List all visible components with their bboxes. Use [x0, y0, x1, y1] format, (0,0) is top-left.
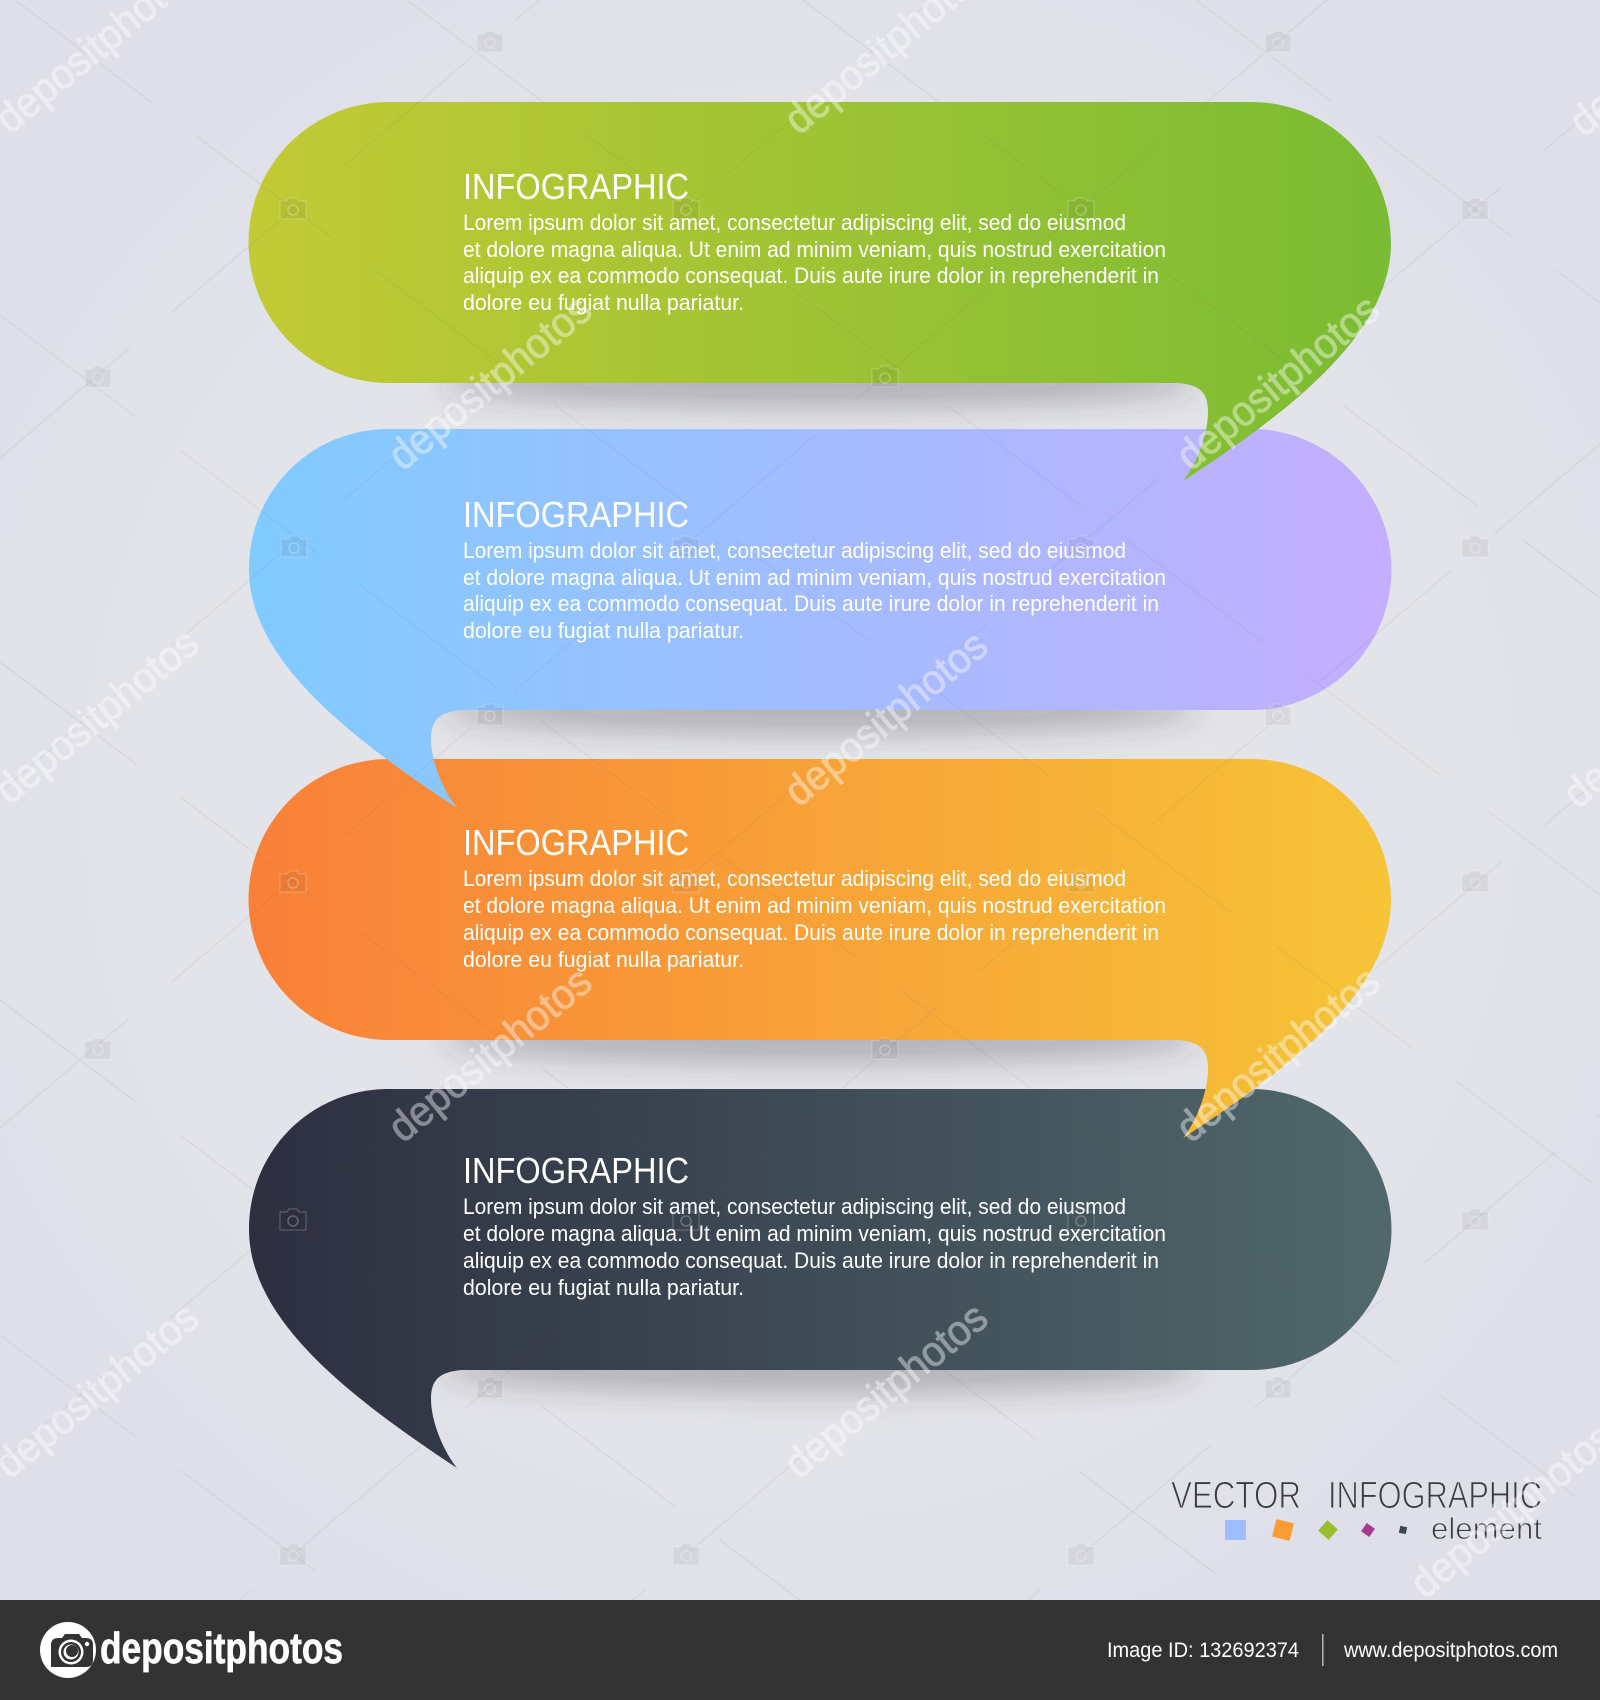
orange bubble body text: Lorem ipsum dolor sit amet, consectetur adipiscing elit, sed do eiusmod — [463, 866, 1126, 891]
panel: blue speech bubble — [249, 429, 1392, 808]
dark bubble body text — [463, 1194, 1166, 1300]
caption heading: VECTOR — [1171, 1475, 1301, 1517]
watermark camera icons — [85, 31, 1488, 1565]
logo wordmark: depositphotos — [100, 1624, 343, 1673]
icon: green diamond — [1318, 1520, 1338, 1540]
dark bubble heading: INFOGRAPHIC — [463, 1150, 689, 1191]
panel: dark speech bubble — [249, 1089, 1392, 1468]
green bubble body text: Lorem ipsum dolor sit amet, consectetur adipiscing elit, sed do eiusmod — [463, 210, 1126, 235]
blue bubble body text: dolore eu fugiat nulla pariatur. — [463, 618, 744, 643]
icon: blue square — [1225, 1520, 1246, 1540]
dark bubble body text: et dolore magna aliqua. Ut enim ad minim veniam, quis nostrud exercitation — [463, 1221, 1166, 1246]
dark bubble body text: Lorem ipsum dolor sit amet, consectetur adipiscing elit, sed do eiusmod — [463, 1194, 1126, 1219]
panel: green speech bubble — [248, 102, 1391, 481]
caption subheading: element — [1431, 1511, 1542, 1546]
dark bubble body text: dolore eu fugiat nulla pariatur. — [463, 1275, 744, 1300]
icon: purple diamond — [1361, 1523, 1375, 1537]
watermark text: depositphotos — [1167, 957, 1388, 1151]
watermark text: depositphotos — [775, 1293, 996, 1487]
green bubble body text: aliquip ex ea commodo consequat. Duis aute irure dolor in reprehenderit in — [463, 263, 1159, 288]
orange bubble heading: INFOGRAPHIC — [463, 822, 689, 863]
orange bubble shape — [248, 759, 1391, 1138]
icon: dark square — [1399, 1526, 1407, 1534]
caption heading — [1171, 1475, 1542, 1517]
green bubble shape — [248, 102, 1391, 481]
green bubble body text: et dolore magna aliqua. Ut enim ad minim veniam, quis nostrud exercitation — [463, 237, 1166, 262]
panel: orange speech bubble — [248, 759, 1391, 1138]
dark bubble shape — [249, 1089, 1392, 1468]
blue bubble shape — [249, 429, 1392, 808]
orange bubble body text: dolore eu fugiat nulla pariatur. — [463, 947, 744, 972]
dark bubble body text: aliquip ex ea commodo consequat. Duis aute irure dolor in reprehenderit in — [463, 1248, 1159, 1273]
image id: Image ID: 132692374 — [1107, 1639, 1299, 1662]
watermark text: depositphotos — [379, 285, 600, 479]
icon: orange square — [1272, 1519, 1294, 1541]
caption heading: INFOGRAPHIC — [1328, 1475, 1542, 1517]
orange bubble body text: et dolore magna aliqua. Ut enim ad minim veniam, quis nostrud exercitation — [463, 893, 1166, 918]
orange bubble body text — [463, 866, 1166, 972]
watermark text: depositphotos — [379, 957, 600, 1151]
blue bubble body text: Lorem ipsum dolor sit amet, consectetur adipiscing elit, sed do eiusmod — [463, 538, 1126, 563]
icon: camera logo — [40, 1622, 96, 1678]
website url: www.depositphotos.com — [1343, 1639, 1558, 1662]
bubble shadows — [440, 360, 1200, 1394]
caption: vector infographic element — [1171, 1475, 1542, 1546]
green bubble body text: dolore eu fugiat nulla pariatur. — [463, 290, 744, 315]
blue bubble body text — [463, 538, 1166, 643]
watermark text: depositphotos — [775, 621, 996, 815]
blue bubble heading: INFOGRAPHIC — [463, 494, 689, 535]
footer background — [0, 1600, 1600, 1700]
watermark text: depositphotos — [1167, 285, 1388, 479]
blue bubble body text: aliquip ex ea commodo consequat. Duis aute irure dolor in reprehenderit in — [463, 591, 1159, 616]
footer bar — [0, 1600, 1600, 1700]
green bubble body text — [463, 210, 1166, 315]
blue bubble body text: et dolore magna aliqua. Ut enim ad minim veniam, quis nostrud exercitation — [463, 565, 1166, 590]
green bubble heading: INFOGRAPHIC — [463, 166, 689, 207]
orange bubble body text: aliquip ex ea commodo consequat. Duis aute irure dolor in reprehenderit in — [463, 920, 1159, 945]
